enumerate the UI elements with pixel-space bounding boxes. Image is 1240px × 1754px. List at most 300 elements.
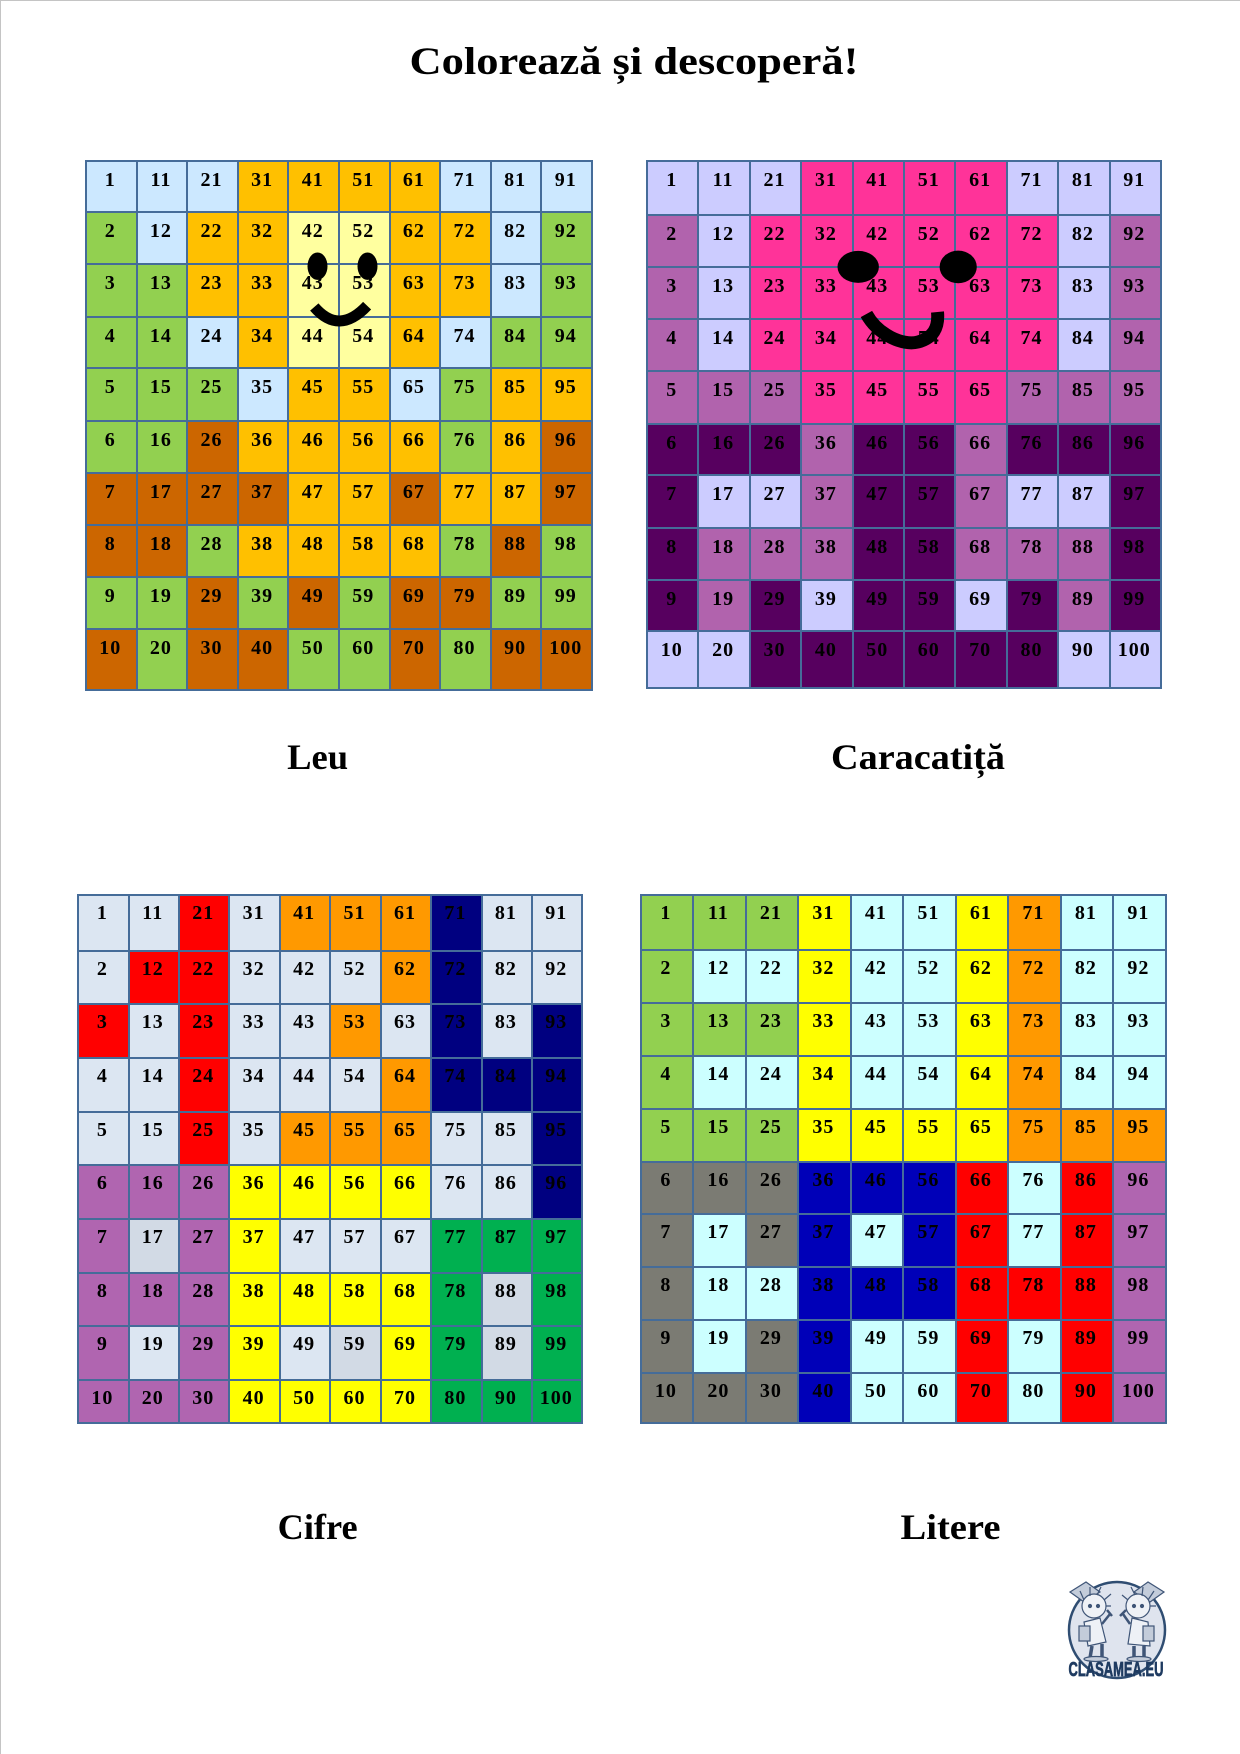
grid: Cifre: 2 xyxy=(97,958,108,980)
grid: Cifre: 40 xyxy=(243,1387,265,1409)
grid: Leu: 31 xyxy=(251,169,273,191)
grid: Caracatiță: 74 xyxy=(1020,327,1042,349)
grid: Caracatiță: 49 xyxy=(866,588,888,610)
grid: Litere xyxy=(640,894,1167,1424)
grid: Leu: 94 xyxy=(555,325,577,347)
grid: Caracatiță: 95 xyxy=(1123,379,1145,401)
grid: Leu: 50 xyxy=(302,637,324,659)
grid: Litere: 31 xyxy=(812,902,834,924)
grid: Leu: 73 xyxy=(453,272,475,294)
grid: Leu: 89 xyxy=(504,585,526,607)
grid: Cifre: 32 xyxy=(243,958,265,980)
grid: Leu: 62 xyxy=(403,220,425,242)
grid: Cifre: 68 xyxy=(394,1280,416,1302)
grid: Litere: 87 xyxy=(1075,1221,1097,1243)
grid: Litere: 39 xyxy=(812,1327,834,1349)
grid: Cifre: 25 xyxy=(192,1119,214,1141)
caption: Litere: Litere xyxy=(900,1507,1001,1547)
grid: Litere: 78 xyxy=(1022,1274,1044,1296)
grid: Litere: 62 xyxy=(970,957,992,979)
grid: Cifre: 48 xyxy=(293,1280,315,1302)
grid: Caracatiță: 11 xyxy=(713,168,734,190)
grid: Litere: 12 xyxy=(707,957,729,979)
grid: Litere: 96 xyxy=(1127,1169,1149,1191)
grid: Caracatiță: 100 xyxy=(1118,639,1151,661)
grid: Caracatiță: 47 xyxy=(866,483,888,505)
grid: Cifre: 90 xyxy=(495,1387,517,1409)
caption: Cifre: Cifre xyxy=(278,1507,358,1547)
grid: Caracatiță: 64 xyxy=(969,327,991,349)
grid: Leu: 34 xyxy=(251,325,273,347)
grid: Litere: 94 xyxy=(1127,1063,1149,1085)
grid: Caracatiță: 13 xyxy=(712,275,734,297)
grid: Cifre: 69 xyxy=(394,1333,416,1355)
grid: Cifre: 71 xyxy=(444,902,466,924)
grid: Cifre: 59 xyxy=(344,1333,366,1355)
grid: Caracatiță: 77 xyxy=(1020,483,1042,505)
grid: Litere: 58 xyxy=(917,1274,939,1296)
grid: Cifre: 97 xyxy=(545,1226,567,1248)
grid: Litere: 75 xyxy=(1022,1116,1044,1138)
grid: Leu: 54 xyxy=(352,325,374,347)
grid: Cifre: 1 xyxy=(97,902,108,924)
grid: Caracatiță: 71 xyxy=(1020,168,1042,190)
grid: Litere: 67 xyxy=(970,1221,992,1243)
grid: Leu: 88 xyxy=(504,533,526,555)
grid: Leu: 22 xyxy=(200,220,222,242)
grid: Leu: 67 xyxy=(403,481,425,503)
grid: Leu: 20 xyxy=(150,637,172,659)
grid: Cifre: 36 xyxy=(243,1172,265,1194)
grid: Leu: 45 xyxy=(302,376,324,398)
grid: Litere: 99 xyxy=(1127,1327,1149,1349)
grid: Litere: 35 xyxy=(812,1116,834,1138)
grid: Leu: 71 xyxy=(453,169,475,191)
grid: Caracatiță: 94 xyxy=(1123,327,1145,349)
grid: Caracatiță: 89 xyxy=(1072,588,1094,610)
grid: Caracatiță: 82 xyxy=(1072,223,1094,245)
grid: Litere: 74 xyxy=(1022,1063,1044,1085)
grid: Caracatiță: 52 xyxy=(918,223,940,245)
grid: Leu: 26 xyxy=(200,429,222,451)
grid: Litere: 7 xyxy=(660,1221,671,1243)
grid: Caracatiță: 16 xyxy=(712,432,734,454)
grid: Caracatiță xyxy=(646,160,1162,689)
grid: Caracatiță: 39 xyxy=(815,588,837,610)
grid: Cifre: 16 xyxy=(142,1172,164,1194)
grid: Cifre: 22 xyxy=(192,958,214,980)
grid: Caracatiță: 92 xyxy=(1123,223,1145,245)
grid: Leu: 95 xyxy=(555,376,577,398)
grid: Caracatiță: 18 xyxy=(712,536,734,558)
grid: Cifre: 64 xyxy=(394,1065,416,1087)
grid: Litere: 41 xyxy=(865,902,887,924)
grid: Caracatiță: 35 xyxy=(815,379,837,401)
grid: Cifre: 62 xyxy=(394,958,416,980)
grid: Cifre: 15 xyxy=(142,1119,164,1141)
grid: Caracatiță: 19 xyxy=(712,588,734,610)
grid: Leu: 61 xyxy=(403,169,425,191)
grid: Cifre: 38 xyxy=(243,1280,265,1302)
grid: Caracatiță: 93 xyxy=(1123,275,1145,297)
grid: Litere: 55 xyxy=(917,1116,939,1138)
grid: Cifre: 76 xyxy=(444,1172,466,1194)
grid: Leu: 78 xyxy=(453,533,475,555)
grid: Litere: 36 xyxy=(812,1169,834,1191)
grid: Leu: 46 xyxy=(302,429,324,451)
grid: Litere: 88 xyxy=(1075,1274,1097,1296)
title: Colorează și descoperă! xyxy=(410,40,858,84)
grid: Litere: 69 xyxy=(970,1327,992,1349)
grid: Leu: 85 xyxy=(504,376,526,398)
grid: Caracatiță: 79 xyxy=(1020,588,1042,610)
grid: Cifre: 94 xyxy=(545,1065,567,1087)
grid: Cifre: 23 xyxy=(192,1011,214,1033)
grid: Litere: 84 xyxy=(1075,1063,1097,1085)
grid: Cifre: 70 xyxy=(394,1387,416,1409)
grid: Leu: 76 xyxy=(453,429,475,451)
grid: Litere: 63 xyxy=(970,1010,992,1032)
grid: Litere: 100 xyxy=(1122,1380,1155,1402)
grid: Leu: 44 xyxy=(302,325,324,347)
grid: Litere: 53 xyxy=(917,1010,939,1032)
grid: Cifre: 66 xyxy=(394,1172,416,1194)
icon: lion face xyxy=(308,253,378,321)
grid: Cifre: 84 xyxy=(495,1065,517,1087)
grid: Leu: 52 xyxy=(352,220,374,242)
grid: Caracatiță: 59 xyxy=(918,588,940,610)
grid: Cifre: 79 xyxy=(444,1333,466,1355)
grid: Caracatiță: 44 xyxy=(866,327,888,349)
grid: Cifre: 81 xyxy=(495,902,517,924)
grid: Cifre: 87 xyxy=(495,1226,517,1248)
grid: Litere: 28 xyxy=(760,1274,782,1296)
grid: Caracatiță: 3 xyxy=(666,275,677,297)
grid: Caracatiță: 88 xyxy=(1072,536,1094,558)
grid: Litere: 5 xyxy=(660,1116,671,1138)
grid: Cifre: 78 xyxy=(444,1280,466,1302)
grid: Leu: 57 xyxy=(352,481,374,503)
grid: Caracatiță: 66 xyxy=(969,432,991,454)
grid: Leu xyxy=(85,160,593,691)
grid: Leu: 51 xyxy=(352,169,374,191)
grid: Litere: 91 xyxy=(1127,902,1149,924)
grid: Cifre: 99 xyxy=(545,1333,567,1355)
grid: Caracatiță: 73 xyxy=(1020,275,1042,297)
grid: Caracatiță: 40 xyxy=(815,639,837,661)
grid: Leu: 79 xyxy=(453,585,475,607)
grid: Cifre: 74 xyxy=(444,1065,466,1087)
grid: Caracatiță: 90 xyxy=(1072,639,1094,661)
grid: Leu: 70 xyxy=(403,637,425,659)
grid: Cifre: 100 xyxy=(540,1387,573,1409)
grid: Litere: 9 xyxy=(660,1327,671,1349)
grid: Litere: 79 xyxy=(1022,1327,1044,1349)
grid: Caracatiță: 10 xyxy=(661,639,683,661)
grid: Leu: 91 xyxy=(555,169,577,191)
grid: Leu: 21 xyxy=(200,169,222,191)
grid: Litere: 85 xyxy=(1075,1116,1097,1138)
grid: Leu: 97 xyxy=(555,481,577,503)
grid: Litere: 54 xyxy=(917,1063,939,1085)
grid: Caracatiță: 78 xyxy=(1020,536,1042,558)
grid: Cifre: 54 xyxy=(344,1065,366,1087)
grid: Litere: 81 xyxy=(1075,902,1097,924)
grid: Litere: 37 xyxy=(812,1221,834,1243)
grid: Cifre: 3 xyxy=(97,1011,108,1033)
grid: Caracatiță: 50 xyxy=(866,639,888,661)
grid: Leu: 16 xyxy=(150,429,172,451)
grid: Cifre: 14 xyxy=(142,1065,164,1087)
grid: Leu: 8 xyxy=(105,533,116,555)
grid: Cifre: 19 xyxy=(142,1333,164,1355)
grid: Leu: 96 xyxy=(555,429,577,451)
grid: Caracatiță: 43 xyxy=(866,275,888,297)
grid: Cifre: 57 xyxy=(344,1226,366,1248)
grid: Caracatiță: 81 xyxy=(1072,168,1094,190)
grid: Litere: 89 xyxy=(1075,1327,1097,1349)
grid: Caracatiță: 70 xyxy=(969,639,991,661)
grid: Caracatiță: 97 xyxy=(1123,483,1145,505)
grid: Litere: 93 xyxy=(1127,1010,1149,1032)
icon: octopus face xyxy=(838,251,977,343)
grid: Caracatiță: 60 xyxy=(918,639,940,661)
grid: Cifre: 61 xyxy=(394,902,416,924)
grid: Caracatiță: 57 xyxy=(918,483,940,505)
grid: Cifre: 7 xyxy=(97,1226,108,1248)
grid: Leu: 69 xyxy=(403,585,425,607)
grid: Litere: 17 xyxy=(707,1221,729,1243)
grid: Leu: 2 xyxy=(105,220,116,242)
grid: Caracatiță: 32 xyxy=(815,223,837,245)
grid: Caracatiță: 51 xyxy=(918,168,940,190)
grid: Cifre: 89 xyxy=(495,1333,517,1355)
grid: Leu: 35 xyxy=(251,376,273,398)
grid: Litere: 72 xyxy=(1022,957,1044,979)
grid: Litere: 50 xyxy=(865,1380,887,1402)
grid: Cifre: 45 xyxy=(293,1119,315,1141)
grid: Caracatiță: 72 xyxy=(1020,223,1042,245)
grid: Caracatiță: 41 xyxy=(866,168,888,190)
grid: Caracatiță: 22 xyxy=(763,223,785,245)
grid: Leu: 72 xyxy=(453,220,475,242)
grid: Cifre: 83 xyxy=(495,1011,517,1033)
grid: Leu: 30 xyxy=(200,637,222,659)
grid: Leu: 80 xyxy=(453,637,475,659)
grid: Cifre: 53 xyxy=(344,1011,366,1033)
grid: Litere: 27 xyxy=(760,1221,782,1243)
grid: Caracatiță: 12 xyxy=(712,223,734,245)
grid: Caracatiță: 69 xyxy=(969,588,991,610)
grid: Litere: 49 xyxy=(865,1327,887,1349)
grid: Cifre: 9 xyxy=(97,1333,108,1355)
grid: Caracatiță: 31 xyxy=(815,168,837,190)
grid: Caracatiță: 15 xyxy=(712,379,734,401)
grid: Litere: 52 xyxy=(917,957,939,979)
grid: Caracatiță: 68 xyxy=(969,536,991,558)
grid: Cifre: 93 xyxy=(545,1011,567,1033)
grid: Caracatiță: 20 xyxy=(712,639,734,661)
grid: Leu: 18 xyxy=(150,533,172,555)
grid: Caracatiță: 84 xyxy=(1072,327,1094,349)
grid: Litere: 42 xyxy=(865,957,887,979)
grid: Litere: 24 xyxy=(760,1063,782,1085)
grid: Cifre: 5 xyxy=(97,1119,108,1141)
grid: Cifre: 30 xyxy=(192,1387,214,1409)
grid: Litere: 20 xyxy=(707,1380,729,1402)
caption: Caracatiță: Caracatiță xyxy=(831,737,1005,778)
grid: Caracatiță: 34 xyxy=(815,327,837,349)
grid: Leu: 12 xyxy=(150,220,172,242)
grid: Cifre: 98 xyxy=(545,1280,567,1302)
grid: Cifre: 39 xyxy=(243,1333,265,1355)
logo: Clasamea.eu: CLASAMEA.EU xyxy=(1068,1659,1164,1681)
grid: Caracatiță: 17 xyxy=(712,483,734,505)
grid: Leu: 11 xyxy=(150,169,171,191)
grid: Caracatiță: 67 xyxy=(969,483,991,505)
grid: Caracatiță: 62 xyxy=(969,223,991,245)
grid: Cifre: 47 xyxy=(293,1226,315,1248)
grid: Cifre: 34 xyxy=(243,1065,265,1087)
grid: Litere: 90 xyxy=(1075,1380,1097,1402)
grid: Cifre: 51 xyxy=(344,902,366,924)
grid: Leu: 53 xyxy=(352,272,374,294)
grid: Caracatiță: 48 xyxy=(866,536,888,558)
grid: Leu: 74 xyxy=(453,325,475,347)
grid: Cifre: 96 xyxy=(545,1172,567,1194)
grid: Caracatiță: 63 xyxy=(969,275,991,297)
grid: Litere: 86 xyxy=(1075,1169,1097,1191)
grid: Litere: 92 xyxy=(1127,957,1149,979)
grid: Cifre: 77 xyxy=(444,1226,466,1248)
grid: Caracatiță: 2 xyxy=(666,223,677,245)
grid: Litere: 11 xyxy=(708,902,729,924)
grid: Litere: 46 xyxy=(865,1169,887,1191)
grid: Leu: 60 xyxy=(352,637,374,659)
grid: Cifre: 46 xyxy=(293,1172,315,1194)
grid: Leu: 99 xyxy=(555,585,577,607)
grid: Leu: 13 xyxy=(150,272,172,294)
grid: Leu: 41 xyxy=(302,169,324,191)
grid: Cifre: 75 xyxy=(444,1119,466,1141)
grid: Cifre: 91 xyxy=(545,902,567,924)
grid: Litere: 83 xyxy=(1075,1010,1097,1032)
grid: Caracatiță: 5 xyxy=(666,379,677,401)
grid: Cifre: 67 xyxy=(394,1226,416,1248)
grid: Caracatiță: 30 xyxy=(763,639,785,661)
grid: Litere: 2 xyxy=(660,957,671,979)
grid: Caracatiță: 76 xyxy=(1020,432,1042,454)
grid: Cifre: 17 xyxy=(142,1226,164,1248)
grid: Leu: 33 xyxy=(251,272,273,294)
grid: Litere: 51 xyxy=(917,902,939,924)
grid: Litere: 73 xyxy=(1022,1010,1044,1032)
grid: Cifre: 86 xyxy=(495,1172,517,1194)
grid: Litere: 70 xyxy=(970,1380,992,1402)
grid: Cifre: 10 xyxy=(91,1387,113,1409)
grid: Cifre: 56 xyxy=(344,1172,366,1194)
grid: Leu: 29 xyxy=(200,585,222,607)
grid: Caracatiță: 83 xyxy=(1072,275,1094,297)
grid: Leu: 49 xyxy=(302,585,324,607)
grid: Litere: 66 xyxy=(970,1169,992,1191)
grid: Leu: 66 xyxy=(403,429,425,451)
grid: Leu: 87 xyxy=(504,481,526,503)
grid: Caracatiță: 33 xyxy=(815,275,837,297)
grid: Litere: 77 xyxy=(1022,1221,1044,1243)
grid: Caracatiță: 1 xyxy=(666,168,677,190)
grid: Cifre: 37 xyxy=(243,1226,265,1248)
grid: Litere: 14 xyxy=(707,1063,729,1085)
grid: Cifre: 11 xyxy=(142,902,163,924)
grid: Cifre: 20 xyxy=(142,1387,164,1409)
grid: Litere: 34 xyxy=(812,1063,834,1085)
grid: Cifre: 35 xyxy=(243,1119,265,1141)
grid: Cifre: 52 xyxy=(344,958,366,980)
grid: Cifre: 24 xyxy=(192,1065,214,1087)
grid: Cifre: 29 xyxy=(192,1333,214,1355)
grid: Litere: 16 xyxy=(707,1169,729,1191)
grid: Cifre: 65 xyxy=(394,1119,416,1141)
grid: Caracatiță: 29 xyxy=(763,588,785,610)
grid: Leu: 100 xyxy=(549,637,582,659)
grid: Cifre: 92 xyxy=(545,958,567,980)
grid: Leu: 5 xyxy=(105,376,116,398)
grid: Leu: 82 xyxy=(504,220,526,242)
grid: Caracatiță: 85 xyxy=(1072,379,1094,401)
grid: Caracatiță: 9 xyxy=(666,588,677,610)
grid: Leu: 77 xyxy=(453,481,475,503)
grid: Litere: 33 xyxy=(812,1010,834,1032)
grid: Cifre: 49 xyxy=(293,1333,315,1355)
grid: Caracatiță: 75 xyxy=(1020,379,1042,401)
grid: Leu: 40 xyxy=(251,637,273,659)
grid: Litere: 4 xyxy=(660,1063,671,1085)
grid: Leu: 47 xyxy=(302,481,324,503)
grid: Caracatiță: 61 xyxy=(969,168,991,190)
grid: Caracatiță: 21 xyxy=(763,168,785,190)
grid: Caracatiță: 7 xyxy=(666,483,677,505)
grid: Caracatiță: 28 xyxy=(763,536,785,558)
grid: Leu: 32 xyxy=(251,220,273,242)
grid: Litere: 71 xyxy=(1022,902,1044,924)
grid: Leu: 65 xyxy=(403,376,425,398)
grid: Leu: 75 xyxy=(453,376,475,398)
grid: Leu: 81 xyxy=(504,169,526,191)
grid: Cifre: 31 xyxy=(243,902,265,924)
grid: Leu: 42 xyxy=(302,220,324,242)
grid: Litere: 1 xyxy=(660,902,671,924)
grid: Litere: 15 xyxy=(707,1116,729,1138)
grid: Leu: 48 xyxy=(302,533,324,555)
grid: Leu: 83 xyxy=(504,272,526,294)
grid: Litere: 98 xyxy=(1127,1274,1149,1296)
grid: Leu: 93 xyxy=(555,272,577,294)
grid: Litere: 29 xyxy=(760,1327,782,1349)
grid: Caracatiță: 56 xyxy=(918,432,940,454)
grid: Cifre: 88 xyxy=(495,1280,517,1302)
grid: Leu: 59 xyxy=(352,585,374,607)
grid: Caracatiță: 14 xyxy=(712,327,734,349)
grid: Leu: 64 xyxy=(403,325,425,347)
grid: Cifre: 82 xyxy=(495,958,517,980)
grid: Litere: 57 xyxy=(917,1221,939,1243)
grid: Caracatiță: 96 xyxy=(1123,432,1145,454)
grid: Cifre: 72 xyxy=(444,958,466,980)
grid: Caracatiță: 87 xyxy=(1072,483,1094,505)
grid: Litere: 26 xyxy=(760,1169,782,1191)
grid: Cifre: 21 xyxy=(192,902,214,924)
